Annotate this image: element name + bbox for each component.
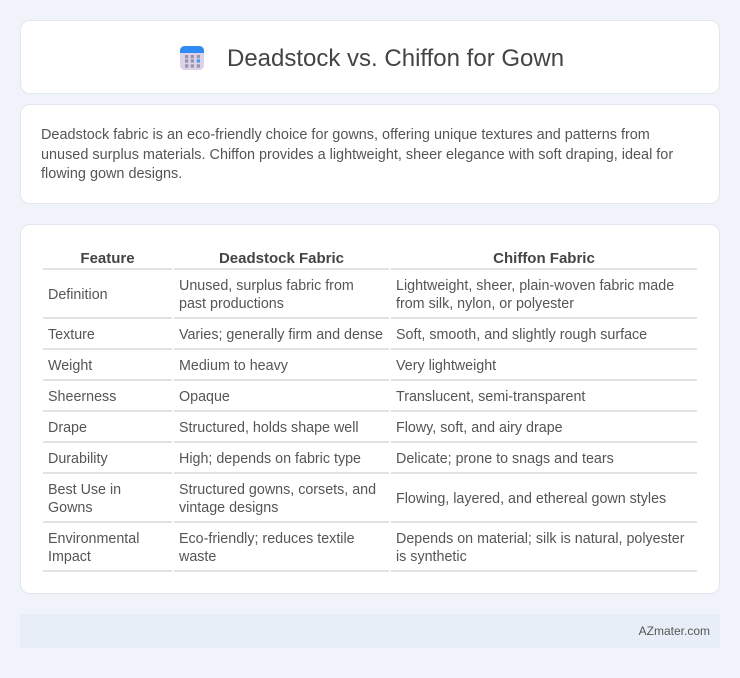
row: Drape <box>43 420 697 443</box>
comparison table: past productions <box>179 296 284 312</box>
comparison table: Eco-friendly; reduces textile <box>179 531 355 547</box>
comparison table: Chiffon Fabric <box>493 250 595 267</box>
title: Deadstock vs. Chiffon for Gown <box>227 45 564 72</box>
row: Weight <box>43 358 697 381</box>
comparison table: Depends on material; silk is natural, polyester <box>396 531 684 547</box>
intro text card <box>20 104 720 204</box>
icon: calendar <box>180 46 204 70</box>
row: Environmental Impact <box>43 531 697 572</box>
comparison table: Flowy, soft, and airy drape <box>396 420 563 436</box>
intro paragraph: Deadstock fabric is an eco-friendly choice for gowns, offering unique textures and patterns from <box>41 127 650 143</box>
comparison table: vintage designs <box>179 500 278 516</box>
comparison table: Environmental <box>48 531 139 547</box>
comparison table: Drape <box>48 420 87 436</box>
header card <box>20 20 720 94</box>
comparison table: Texture <box>48 327 95 343</box>
comparison table: from silk, nylon, or polyester <box>396 296 574 312</box>
comparison table: Very lightweight <box>396 358 496 374</box>
comparison table: is synthetic <box>396 549 467 565</box>
row: Sheerness <box>43 389 697 412</box>
footer bar <box>20 614 720 648</box>
comparison table: Best Use in <box>48 482 121 498</box>
row: Best Use in Gowns <box>43 482 697 523</box>
intro paragraph: flowing gown designs. <box>41 166 182 182</box>
comparison table: Sheerness <box>48 389 116 405</box>
comparison table: Impact <box>48 549 91 565</box>
comparison table panel <box>20 224 720 594</box>
comparison table: Flowing, layered, and ethereal gown styles <box>396 491 666 507</box>
comparison table: Lightweight, sheer, plain-woven fabric made <box>396 278 674 294</box>
comparison table: Durability <box>48 451 108 467</box>
comparison table: Gowns <box>48 500 92 516</box>
comparison table: Delicate; prone to snags and tears <box>396 451 614 467</box>
comparison table: Soft, smooth, and slightly rough surface <box>396 327 647 343</box>
comparison table: Unused, surplus fabric from <box>179 278 354 294</box>
comparison table: High; depends on fabric type <box>179 451 361 467</box>
row: Durability <box>43 451 697 474</box>
comparison table: Medium to heavy <box>179 358 288 374</box>
row: Definition <box>43 278 697 319</box>
header row <box>43 250 697 270</box>
comparison table: Translucent, semi-transparent <box>396 389 585 405</box>
comparison table: Deadstock Fabric <box>219 250 344 267</box>
intro paragraph: unused surplus materials. Chiffon provides a lightweight, sheer elegance with soft draping, ideal for <box>41 146 673 162</box>
comparison table: Definition <box>48 287 108 303</box>
comparison table: Structured, holds shape well <box>179 420 359 436</box>
comparison table: waste <box>179 549 216 565</box>
intro paragraph <box>41 127 673 182</box>
comparison table: Feature <box>80 250 135 267</box>
comparison table: Structured gowns, corsets, and <box>179 482 376 498</box>
footer source: AZmater.com <box>639 624 710 638</box>
comparison table: Weight <box>48 358 92 374</box>
comparison table: Varies; generally firm and dense <box>179 327 383 343</box>
comparison table: Opaque <box>179 389 230 405</box>
row: Texture <box>43 327 697 350</box>
